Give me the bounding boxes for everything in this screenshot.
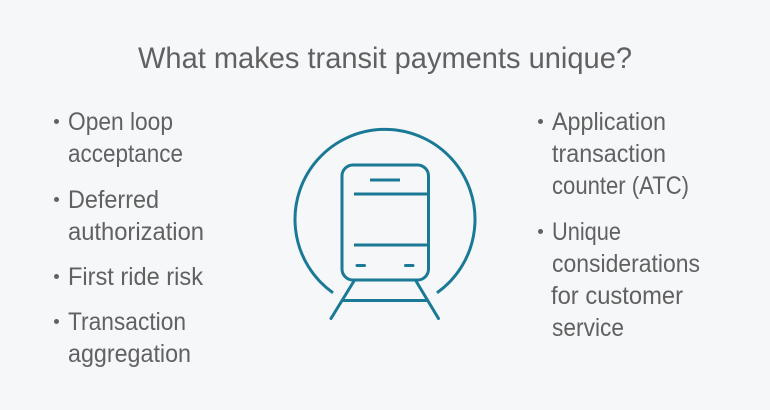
- train headlights: [357, 264, 413, 267]
- railway tracks: [331, 281, 438, 318]
- bullet: deferred authorization: authorization: [68, 218, 204, 246]
- bullet: deferred authorization: [54, 186, 204, 246]
- bullet: open loop acceptance: [54, 108, 183, 168]
- tunnel arc: [295, 129, 475, 293]
- bullet: first ride risk: First ride risk: [68, 263, 203, 291]
- bullet: transaction aggregation: [54, 308, 191, 368]
- bullet: deferred authorization: Deferred: [68, 186, 159, 214]
- bullet: application transaction counter: counter (ATC): [552, 172, 689, 200]
- title: What makes transit payments unique?: [138, 42, 632, 75]
- bullet: application transaction counter: transaction: [552, 140, 666, 168]
- bullet: transaction aggregation: Transaction: [68, 308, 186, 336]
- bullet: application transaction counter: Application: [552, 108, 666, 136]
- bullet: application transaction counter: [538, 108, 689, 200]
- bullet: customer service considerations: service: [552, 314, 624, 342]
- left bullet list: [54, 108, 204, 368]
- bullet: open loop acceptance: Open loop: [68, 108, 173, 136]
- bullet: customer service considerations: for customer: [551, 282, 683, 310]
- bullet: customer service considerations: Unique: [552, 218, 621, 246]
- bullet: customer service considerations: considerations: [552, 250, 700, 278]
- train windscreen and panel lines: [354, 180, 428, 245]
- bullet: customer service considerations: [538, 218, 700, 342]
- icon: train in tunnel: [295, 129, 475, 318]
- right bullet list: [538, 108, 700, 342]
- bullet: transaction aggregation: aggregation: [68, 340, 191, 368]
- bullet: open loop acceptance: acceptance: [68, 140, 183, 168]
- train body: [342, 165, 428, 280]
